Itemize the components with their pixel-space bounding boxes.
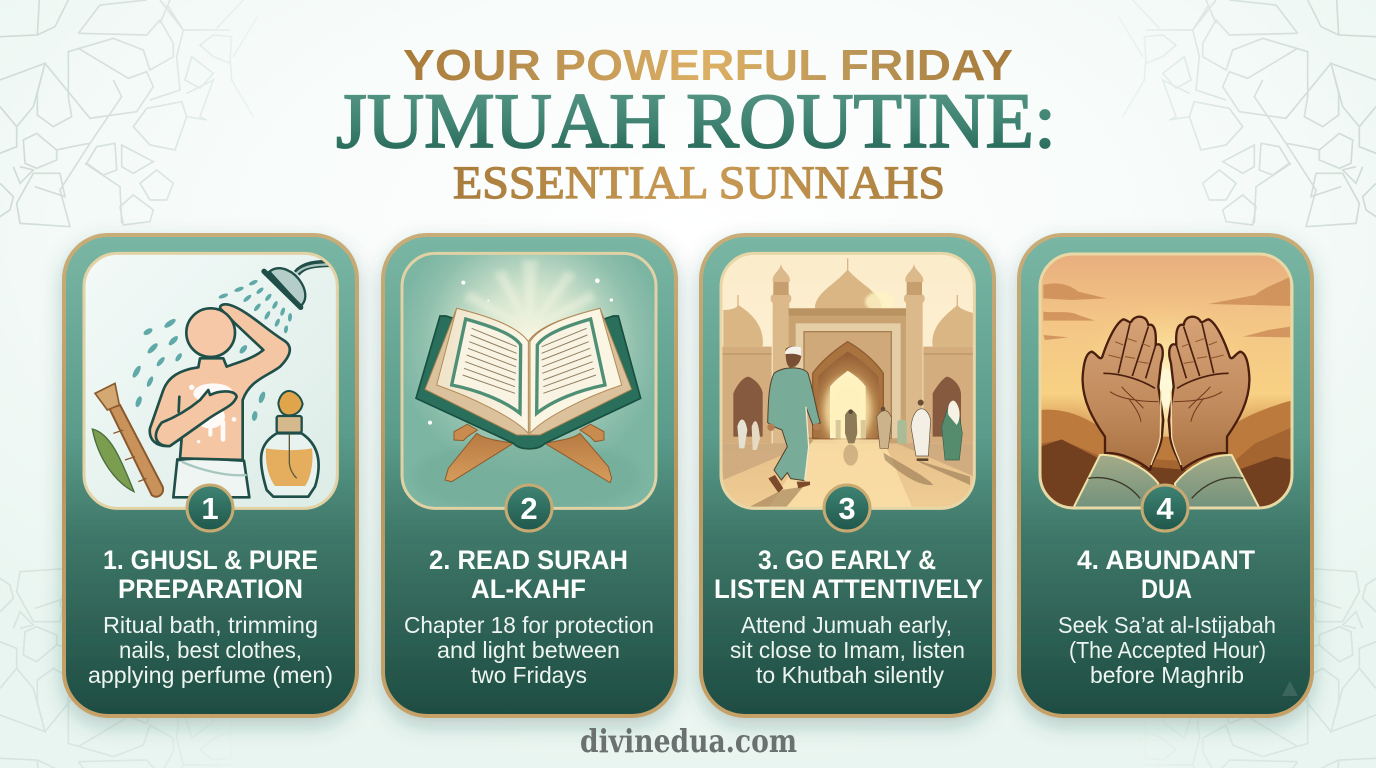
heading: LISTEN ATTENTIVELY	[714, 574, 983, 604]
description	[88, 612, 333, 688]
book pages	[425, 308, 632, 435]
description	[404, 612, 654, 688]
book cover	[416, 316, 641, 449]
illustration: shower, person, miswak and perfume	[84, 253, 337, 508]
icon: shower head	[264, 263, 337, 307]
archway	[813, 342, 883, 438]
icon: leaf	[92, 429, 134, 492]
figure: towel	[173, 459, 249, 497]
decorative pattern: top right	[1118, 0, 1376, 227]
foreground man	[767, 346, 820, 493]
illustration: open quran on stand	[402, 253, 656, 513]
title line 2: JUMUAH ROUTINE:	[336, 77, 1056, 164]
number badge 2	[506, 485, 552, 531]
decorative pattern: top left	[0, 0, 258, 227]
title line 3: ESSENTIAL SUNNAHS	[453, 157, 945, 209]
heading	[1077, 545, 1255, 604]
description: two Fridays	[471, 662, 587, 688]
light rays	[464, 258, 596, 315]
panel: card 4 abundant dua	[1019, 235, 1312, 716]
heading: 4. ABUNDANT	[1077, 545, 1255, 575]
panel: card 2 surah al-kahf	[383, 235, 676, 716]
description: to Khutbah silently	[756, 662, 945, 688]
icon: miswak	[95, 383, 163, 497]
hand right (mirrored)	[1169, 317, 1249, 470]
heading: AL-KAHF	[471, 574, 586, 604]
foreground man shadow	[750, 487, 803, 507]
heading	[714, 545, 983, 604]
description: Attend Jumuah early,	[741, 612, 952, 638]
description	[1058, 612, 1276, 688]
heading	[429, 545, 628, 604]
text lines	[463, 328, 596, 393]
number badge 4: 4	[1156, 491, 1174, 526]
description: (The Accepted Hour)	[1069, 637, 1266, 663]
sleeves	[1074, 455, 1158, 510]
heading: 2. READ SURAH	[429, 545, 628, 575]
main gate wall	[789, 308, 906, 445]
number badge 2: 2	[520, 491, 538, 526]
minarets	[771, 263, 925, 445]
description: before Maghrib	[1090, 662, 1244, 688]
number badge 1: 1	[201, 491, 219, 526]
decorative pattern: bottom right	[1118, 568, 1376, 768]
sun glow	[1094, 326, 1177, 437]
page frames	[452, 319, 521, 413]
hands glow	[1160, 368, 1172, 409]
description	[730, 612, 965, 688]
description: Chapter 18 for protection	[404, 612, 654, 638]
panel: card 1 ghusl	[64, 235, 357, 716]
figure: person torso and raised arm	[150, 304, 290, 460]
number badge 4	[1142, 485, 1188, 531]
description: nails, best clothes,	[119, 637, 302, 663]
description: applying perfume (men)	[88, 662, 333, 688]
mosque domes	[723, 258, 974, 347]
hills	[1042, 400, 1290, 460]
heading: 1. GHUSL & PURE	[103, 545, 318, 575]
illustration: mosque with worshippers	[721, 253, 974, 510]
figure: soap foam	[189, 383, 236, 443]
number badge 3	[824, 485, 870, 531]
decorative pattern: bottom left	[0, 568, 258, 768]
description: and light between	[437, 637, 620, 663]
number badge 1	[187, 485, 233, 531]
faint corner mark	[1282, 681, 1298, 696]
illustration: praying hands at sunset	[1040, 254, 1293, 510]
description: Seek Sa’at al-Istijabah	[1058, 612, 1276, 638]
title line 1: YOUR POWERFUL FRIDAY	[403, 41, 1013, 90]
description: Ritual bath, trimming	[103, 612, 318, 638]
water drops	[131, 279, 292, 421]
figure: hand on chest	[156, 390, 237, 446]
courtyard floor	[721, 443, 974, 510]
description: sit close to Imam, listen	[730, 637, 965, 663]
title	[336, 41, 1056, 209]
side wings	[721, 347, 772, 443]
icon: perfume bottle	[261, 391, 319, 497]
panel: card 3 go early	[701, 235, 994, 716]
people in distance	[737, 400, 970, 485]
number badge 3: 3	[838, 491, 856, 526]
heading: DUA	[1141, 574, 1192, 604]
sparkles	[428, 278, 613, 425]
heading: 3. GO EARLY &	[758, 545, 936, 575]
heading: PREPARATION	[118, 574, 303, 604]
book stand	[445, 424, 612, 483]
figure: head	[186, 308, 235, 357]
heading	[103, 545, 318, 604]
watermark: divinedua.com	[580, 722, 797, 760]
clouds	[1043, 277, 1290, 340]
hand left	[1083, 317, 1163, 470]
